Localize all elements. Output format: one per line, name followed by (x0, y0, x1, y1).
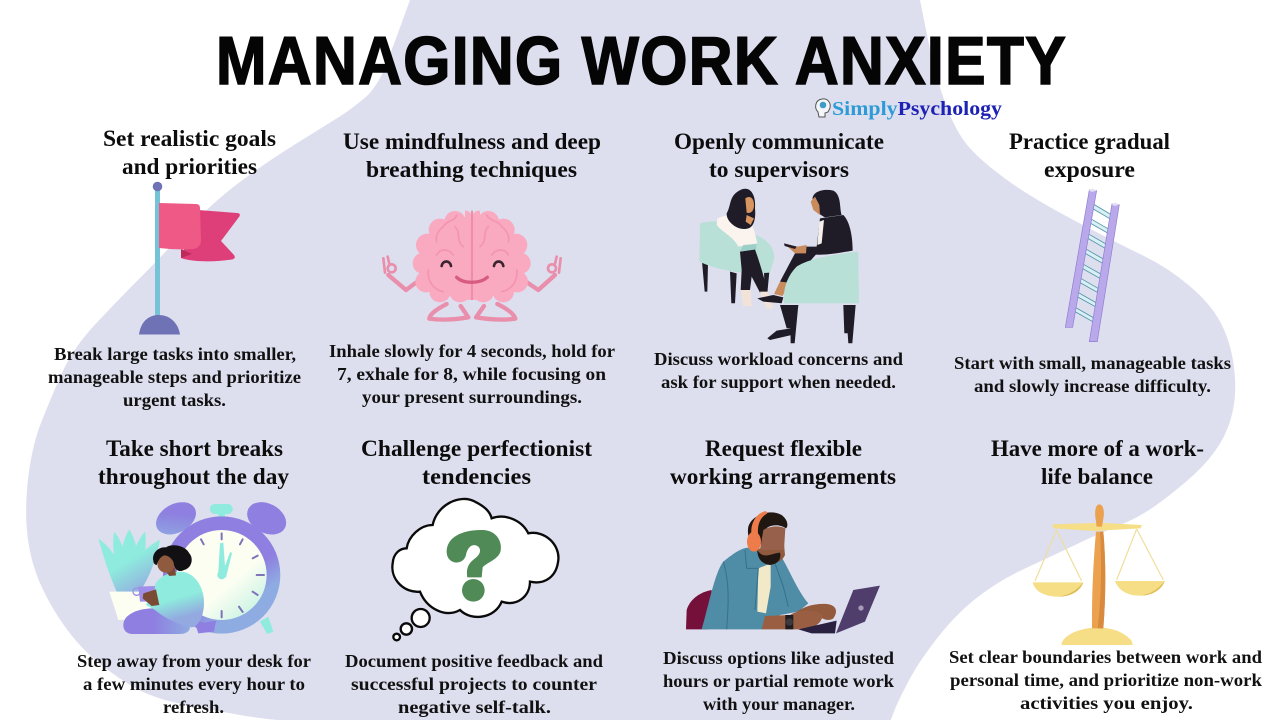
heading: exposure (1044, 157, 1135, 183)
body text: activities you enjoy. (1020, 693, 1193, 713)
heading (991, 436, 1204, 490)
body text: Set clear boundaries between work and (949, 647, 1262, 667)
body text: ask for support when needed. (661, 372, 896, 392)
heading (361, 436, 592, 490)
heading: throughout the day (98, 464, 289, 490)
heading: Set realistic goals (103, 126, 276, 152)
panel: set realistic goals (48, 126, 301, 410)
icon: man with headphones at laptop (686, 511, 880, 633)
heading: Have more of a work- (991, 436, 1204, 462)
heading: breathing techniques (366, 157, 577, 183)
body text (663, 648, 894, 714)
heading: Practice gradual (1009, 129, 1170, 155)
icon: balance scale (1033, 504, 1165, 645)
heading (1009, 129, 1170, 183)
panel: short breaks (77, 436, 311, 717)
logo wordmark: SimplyPsychology (832, 98, 1003, 120)
heading (343, 129, 601, 183)
body text: personal time, and prioritize non-work (950, 670, 1262, 690)
icon: ladder (1065, 189, 1119, 342)
body text: Start with small, manageable tasks (954, 353, 1231, 373)
body text: Inhale slowly for 4 seconds, hold for (329, 341, 615, 361)
body text: successful projects to counter (351, 674, 597, 694)
icon: alarm clock and person (98, 496, 292, 634)
body text: manageable steps and prioritize (48, 367, 301, 387)
title: MANAGING WORK ANXIETY (216, 23, 1067, 99)
heading (670, 436, 896, 490)
icon: meditating brain (383, 211, 561, 320)
heading: Request flexible (705, 436, 862, 462)
body text: Break large tasks into smaller, (54, 344, 296, 364)
heading: life balance (1041, 464, 1153, 490)
body text (48, 344, 301, 410)
icon: thought bubble with question mark (392, 499, 558, 640)
body text: Step away from your desk for (77, 651, 311, 671)
body text: Discuss options like adjusted (663, 648, 894, 668)
body text: negative self-talk. (398, 697, 551, 717)
heading: Take short breaks (106, 436, 283, 462)
panel: gradual exposure (954, 129, 1231, 396)
body text: 7, exhale for 8, while focusing on (337, 364, 606, 384)
heading (103, 126, 276, 180)
body text (345, 651, 603, 717)
heading: Challenge perfectionist (361, 436, 592, 462)
heading: and priorities (122, 154, 257, 180)
body text (77, 651, 311, 717)
body text: hours or partial remote work (663, 671, 894, 691)
body text: refresh. (163, 697, 224, 717)
panel: flexible working (663, 436, 896, 714)
logo: Simply Psychology (816, 98, 1003, 120)
body text (954, 353, 1231, 396)
body text: with your manager. (703, 694, 855, 714)
body text: Document positive feedback and (345, 651, 603, 671)
body text: urgent tasks. (123, 390, 226, 410)
heading: Openly communicate (674, 129, 884, 155)
panel: challenge perfectionist tendencies (345, 436, 603, 717)
heading (674, 129, 884, 183)
heading (98, 436, 289, 490)
heading: working arrangements (670, 464, 896, 490)
body text (949, 647, 1262, 713)
panel: communicate to supervisors (654, 129, 903, 392)
heading: Use mindfulness and deep (343, 129, 601, 155)
icon: head logo (816, 99, 830, 117)
icon: flag (139, 182, 240, 334)
body text: a few minutes every hour to (83, 674, 305, 694)
panel: mindfulness and breathing (329, 129, 615, 407)
heading: to supervisors (709, 157, 849, 183)
body text: your present surroundings. (362, 387, 582, 407)
body text: and slowly increase difficulty. (974, 376, 1211, 396)
body text (329, 341, 615, 407)
heading: tendencies (422, 464, 531, 490)
body text (654, 349, 903, 392)
panel: work-life balance (949, 436, 1262, 713)
icon: two people talking in chairs (699, 189, 859, 343)
body text: Discuss workload concerns and (654, 349, 903, 369)
